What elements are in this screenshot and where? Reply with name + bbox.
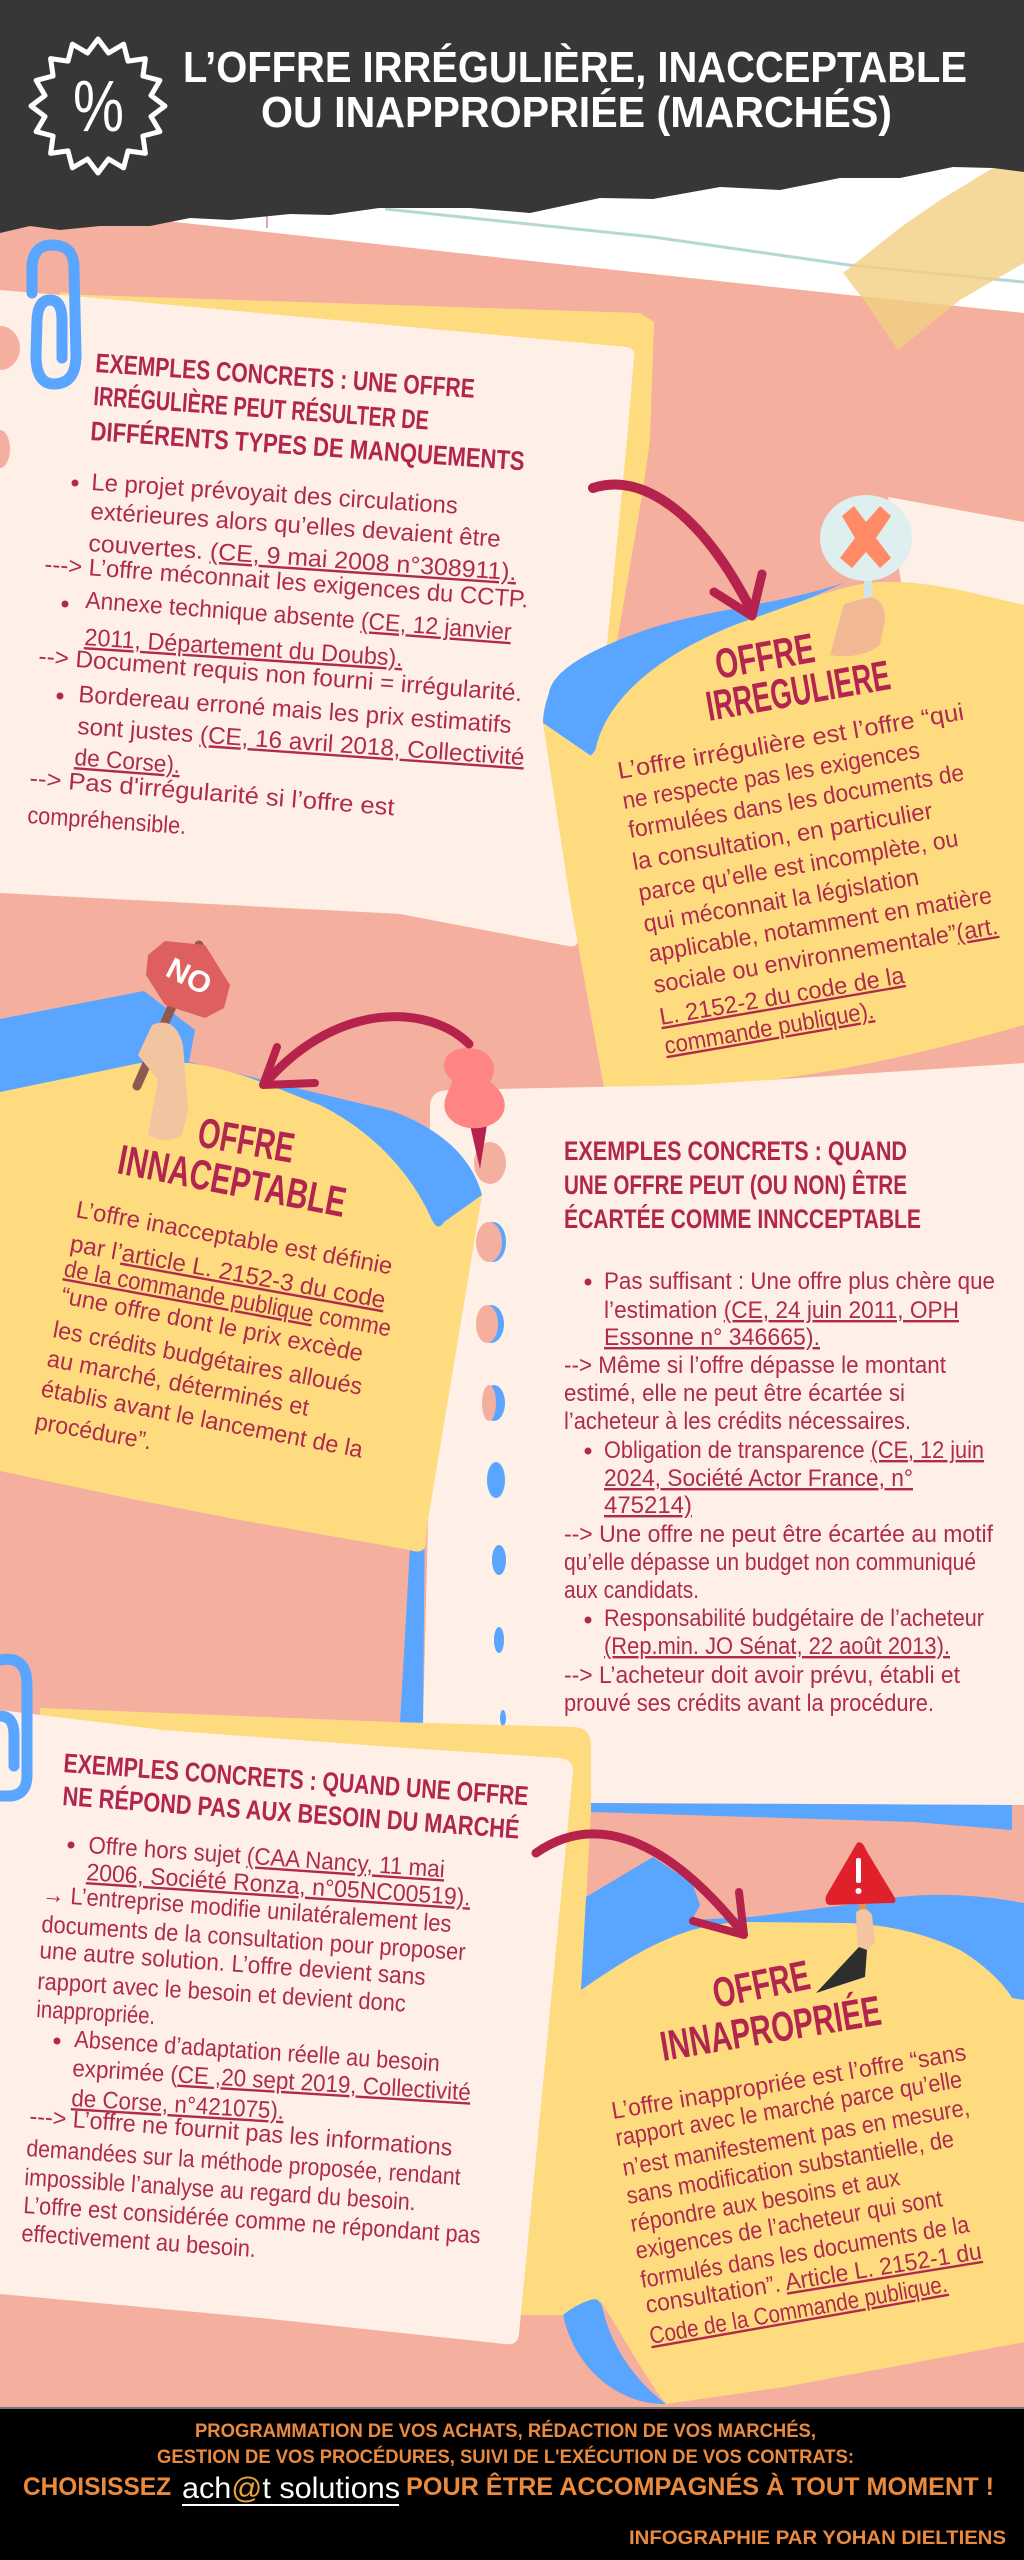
heading [90, 348, 526, 476]
text block: exemples: qu’elle dépasse un budget non communiqué [564, 1549, 976, 1576]
text block: exemples: --> Même si l’offre dépasse le montant [564, 1352, 946, 1379]
text block: définition: L’offre inappropriée est l’offre “sans [610, 2039, 968, 2125]
icon: paperclip [0, 1659, 27, 1796]
text block: exemples: aux candidats. [564, 1577, 699, 1604]
text block: définition: répondre aux besoins et aux [628, 2164, 902, 2238]
text block: définition: “une offre dont le prix excède [59, 1282, 365, 1367]
panel: offre irrégulière [543, 495, 1024, 1088]
text block: exemples: ---> L’offre ne fournit pas les informations [29, 2103, 453, 2162]
torn white paper strip [100, 140, 1024, 313]
text block: exemples: couvertes. (CE, 9 mai 2008 n°308911). [88, 530, 517, 586]
heading [62, 1748, 530, 1845]
heading: IRRÉGULIÈRE PEUT RÉSULTER DE [93, 380, 430, 436]
text block: définition: la consultation, en particulier [630, 798, 935, 876]
title: IRREGULIERE [702, 651, 894, 730]
icon: hand holding NO sign [137, 941, 230, 1140]
icon: pushpin [444, 1048, 505, 1169]
heading: EXEMPLES CONCRETS : QUAND [564, 1136, 907, 1166]
text block: définition: rapport avec le marché parce qu’elle [613, 2066, 964, 2152]
text block: exemples [27, 469, 529, 840]
text block: exemples: documents de la consultation pour proposer [41, 1911, 466, 1966]
title [702, 624, 894, 730]
text block: définition: établis avant le lancement de la [39, 1375, 366, 1464]
text block: exemples: compréhensible. [27, 802, 187, 840]
text block: définition: L’offre inacceptable est définie [74, 1196, 395, 1280]
text block: exemples: ---> L’offre méconnait les exigences du CCTP. [44, 551, 529, 614]
text block: exemples: effectivement au besoin. [21, 2220, 257, 2263]
title [183, 42, 967, 137]
logo: ach@t solutions: ach@t solutions [182, 2472, 400, 2505]
text block: exemples: Obligation de transparence (CE, 12 juin [604, 1437, 984, 1464]
text block: exemples: exprimée (CE ,20 sept 2019, Collectivité [72, 2055, 472, 2106]
panel: exemples offre inacceptable [423, 1063, 1024, 1805]
text block: définition: n’est manifestement pas en mesure, [620, 2094, 972, 2182]
heading [564, 1136, 921, 1234]
text block: exemples: --> Pas d'irrégularité si l’offre est [29, 765, 396, 821]
text block: exemples: Bordereau erroné mais les prix estimatifs [78, 681, 512, 739]
text block: exemples: → L’entreprise modifie unilatéralement les [42, 1881, 452, 1938]
icon: hand holding NO sign: NO [161, 952, 217, 1002]
icon: hand holding X sign [820, 495, 912, 656]
footer text: call to action: POUR ÊTRE ACCOMPAGNÉS À TOUT MOMENT ! [406, 2471, 994, 2501]
text block: définition: sans modification substantielle, de [624, 2126, 956, 2210]
text block: exemples: demandées sur la méthode proposée, rendant [26, 2135, 462, 2191]
yellow tape [843, 168, 1024, 350]
arrow: exemples vers offre inacceptable [263, 1017, 469, 1085]
text block: exemples: rapport avec le besoin et devient donc [37, 1968, 407, 2018]
text block: définition: sociale ou environnementale”(art. [651, 913, 1000, 999]
text block: exemples: extérieures alors qu’elles devaient être [90, 498, 501, 553]
text block: exemples: --> L’acheteur doit avoir prévu, établi et [564, 1662, 960, 1689]
arrow: exemples vers offre inappropriée [536, 1834, 744, 1935]
icon: holes [0, 326, 20, 468]
title: OU INAPPROPRIÉE (MARCHÉS) [261, 87, 892, 137]
header band [0, 0, 1024, 233]
title: OFFRE [711, 624, 818, 688]
text block: exemples: prouvé ses crédits avant la procédure. [564, 1690, 934, 1717]
text block: définition: parce qu’elle est incomplète, ou [636, 825, 960, 907]
text block: exemples: estimé, elle ne peut être écartée si [564, 1380, 905, 1407]
title [114, 1109, 350, 1226]
heading: EXEMPLES CONCRETS : QUAND UNE OFFRE [63, 1748, 530, 1811]
panel: exemples offre inappropriée [0, 1659, 591, 2344]
text block: exemples: l’acheteur à les crédits nécessaires. [564, 1408, 911, 1435]
text block: définition [610, 2039, 984, 2350]
text block: définition: consultation”. Article L. 2152-1 du [644, 2238, 984, 2319]
text block: exemples: 2011, Département du Doubs). [84, 624, 404, 672]
heading: DIFFÉRENTS TYPES DE MANQUEMENTS [90, 415, 526, 476]
text block: définition: commande publique). [662, 997, 876, 1060]
panel: offre inacceptable [0, 941, 482, 1723]
text block: définition: formulés dans les documents de la [638, 2211, 972, 2294]
text block: définition: L’offre irrégulière est l’offre “qui [615, 699, 966, 785]
text block: exemples [564, 1268, 995, 1717]
text block: exemples: Le projet prévoyait des circulations [91, 469, 459, 520]
icon: paperclip [32, 245, 76, 384]
title: INNACEPTABLE [114, 1136, 350, 1226]
icon: percent badge [31, 39, 165, 173]
panel: exemples offre irrégulière [0, 245, 654, 946]
text block: définition: Code de la Commande publique. [647, 2271, 949, 2350]
text block: exemples: --> Une offre ne peut être écartée au motif [564, 1521, 993, 1548]
text block: définition [615, 699, 1000, 1060]
text block: exemples: Absence d’adaptation réelle au besoin [74, 2026, 441, 2077]
footer text: services: GESTION DE VOS PROCÉDURES, SUIVI DE L'EXÉCUTION DE VOS CONTRATS: [157, 2446, 854, 2468]
text block: définition: procédure”. [33, 1408, 154, 1455]
icon: hand holding warning sign [816, 1842, 895, 1993]
text block: exemples: impossible l’analyse au regard du besoin. [24, 2164, 417, 2216]
text block: exemples [21, 1832, 481, 2263]
text block: exemples: l’estimation (CE, 24 juin 2011, OPH [604, 1297, 959, 1324]
text block: exemples: inappropriée. [36, 1996, 156, 2030]
text block: définition: par l’article L. 2152-3 du code [68, 1230, 388, 1314]
text block: exemples: Responsabilité budgétaire de l’acheteur [604, 1605, 984, 1632]
heading: ÉCARTÉE COMME INNCCEPTABLE [564, 1203, 921, 1234]
icon: percent badge: % [73, 67, 124, 147]
heading: NE RÉPOND PAS AUX BESOIN DU MARCHÉ [62, 1780, 521, 1845]
text block: définition: au marché, déterminés et [45, 1345, 312, 1422]
title: OFFRE [194, 1109, 298, 1172]
title: L’OFFRE IRRÉGULIÈRE, INACCEPTABLE [183, 42, 967, 92]
text block: définition: applicable, notamment en matière [646, 882, 994, 968]
title: INNAPROPRIÉE [657, 1987, 884, 2070]
title [657, 1951, 884, 2070]
text block: exemples: 2024, Société Actor France, n° [604, 1465, 913, 1492]
heading: EXEMPLES CONCRETS : UNE OFFRE [95, 348, 476, 404]
text block: exemples: 475214) [604, 1492, 692, 1519]
footer text: call to action: CHOISISSEZ [23, 2473, 171, 2501]
text block: exemples: une autre solution. L’offre devient sans [39, 1937, 427, 1991]
title: OFFRE [708, 1951, 814, 2017]
text block: définition: de la commande publique comme [62, 1255, 393, 1342]
text block: définition: L. 2152-2 du code de la [657, 962, 907, 1031]
text block: exemples: L’offre est considérée comme ne répondant pas [23, 2192, 481, 2249]
text block: définition: qui méconnait la législation [641, 864, 921, 938]
text block: définition: les crédits budgétaires alloués [51, 1316, 365, 1401]
footer credit: INFOGRAPHIE PAR YOHAN DIELTIENS [629, 2528, 1006, 2549]
footer [0, 2407, 1024, 2560]
footer text: services: PROGRAMMATION DE VOS ACHATS, RÉDACTION DE VOS MARCHÉS, [195, 2420, 816, 2442]
text block: exemples: Annexe technique absente (CE, 12 janvier [85, 587, 512, 646]
text block: exemples: Offre hors sujet (CAA Nancy, 11 mai [88, 1832, 446, 1883]
text block: définition [33, 1196, 395, 1464]
text block: exemples: de Corse, n°421075). [71, 2085, 285, 2125]
panel: offre inappropriée [563, 1803, 1024, 2404]
text block: exemples: --> Document requis non fourni = irrégularité. [38, 643, 523, 707]
arrow: exemples vers offre irrégulière [593, 484, 762, 616]
text block: définition: exigences de l’acheteur qui sont [633, 2185, 945, 2265]
text block: exemples: Pas suffisant : Une offre plus chère que [604, 1268, 995, 1295]
footer text: services [157, 2420, 854, 2468]
icon: holes [474, 1142, 506, 1726]
text block: exemples: (Rep.min. JO Sénat, 22 août 2013). [604, 1633, 950, 1660]
text block: exemples: sont justes (CE, 16 avril 2018, Collectivité [77, 713, 525, 771]
footer text: call to action [23, 2471, 994, 2501]
text block: exemples: Essonne n° 346665). [604, 1324, 820, 1351]
text block: exemples: 2006, Société Ronza, n°05NC00519). [86, 1859, 472, 1912]
text block: définition: ne respecte pas les exigences [620, 737, 922, 815]
text block: exemples: de Corse). [74, 744, 181, 779]
text block: définition: formulées dans les documents de [626, 759, 966, 844]
heading: UNE OFFRE PEUT (OU NON) ÊTRE [564, 1169, 907, 1200]
